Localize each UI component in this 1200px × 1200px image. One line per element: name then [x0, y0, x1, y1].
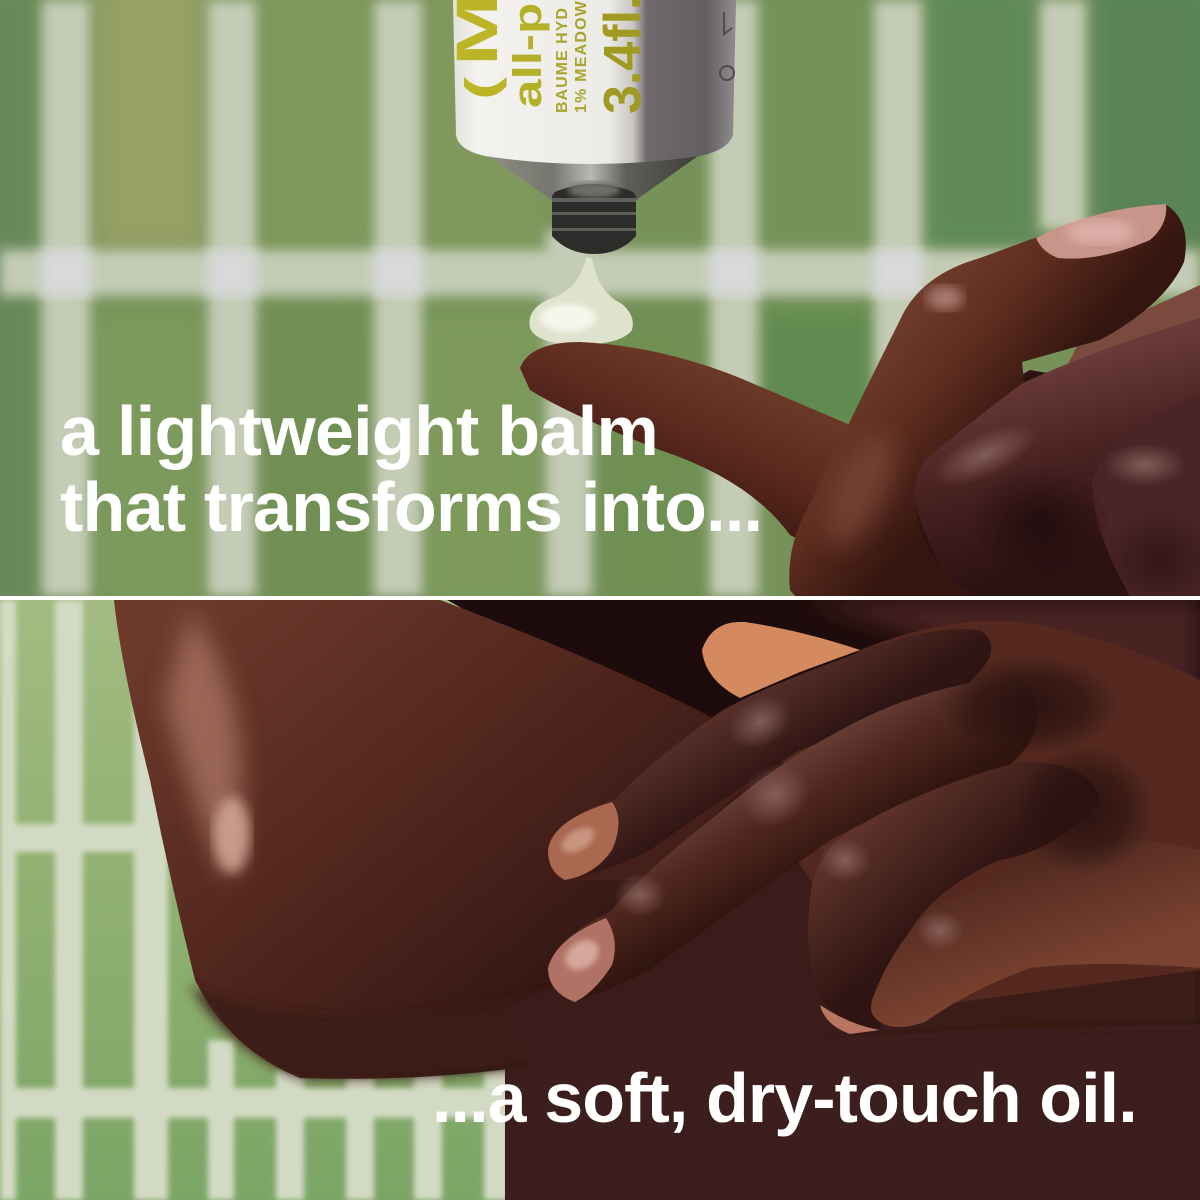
fourth finger and palm — [871, 840, 1200, 1027]
lower middle finger — [548, 675, 1038, 1002]
thumb — [789, 204, 1186, 596]
torso below arm — [505, 1024, 1200, 1200]
third finger — [808, 762, 1100, 1032]
panel: top photo, balm on fingertip — [0, 0, 1200, 620]
tube nozzle — [552, 182, 636, 254]
back fingers — [1068, 285, 1200, 364]
ring finger knuckle — [1092, 395, 1200, 596]
tube label text: all-p — [504, 3, 550, 108]
divider — [0, 596, 1200, 600]
dark gap above arm — [448, 600, 1200, 718]
caption: bottom: ...a soft, dry-touch oil. — [432, 1059, 1137, 1137]
panel: top photo, balm on fingertip: that transforms into... — [60, 468, 762, 546]
knuckle highlights — [733, 700, 788, 746]
nail: lower finger — [548, 918, 615, 1002]
nail: upper finger — [548, 802, 618, 880]
panel: bottom photo, oil on elbow — [0, 590, 1200, 1200]
hand — [520, 204, 1200, 610]
thumb tip behind — [702, 622, 860, 698]
balm drop — [529, 258, 633, 345]
thumb nail — [1036, 204, 1166, 259]
tube label text: BAUME HYD — [554, 7, 571, 113]
arm — [114, 600, 1200, 1079]
hands — [548, 621, 1200, 1034]
nail: third finger — [820, 1005, 880, 1034]
green tiled background — [0, 0, 1200, 620]
caption: top: a lightweight balm — [60, 392, 658, 470]
tube side embossing — [720, 12, 734, 80]
base fill behind fist — [915, 370, 1046, 570]
index finger with balm — [520, 342, 850, 540]
back of hand — [780, 621, 1200, 1010]
tube label text: 1% MEADOW — [573, 0, 590, 113]
upper finger — [548, 629, 991, 880]
tube: product — [444, 0, 736, 254]
green tiled background — [0, 600, 505, 1200]
tube label text: ( — [457, 76, 507, 100]
body upper right — [821, 600, 1200, 680]
tube label text — [456, 0, 640, 113]
lower fist fingers — [915, 318, 1200, 568]
shadow: between knuckles — [952, 661, 1108, 748]
